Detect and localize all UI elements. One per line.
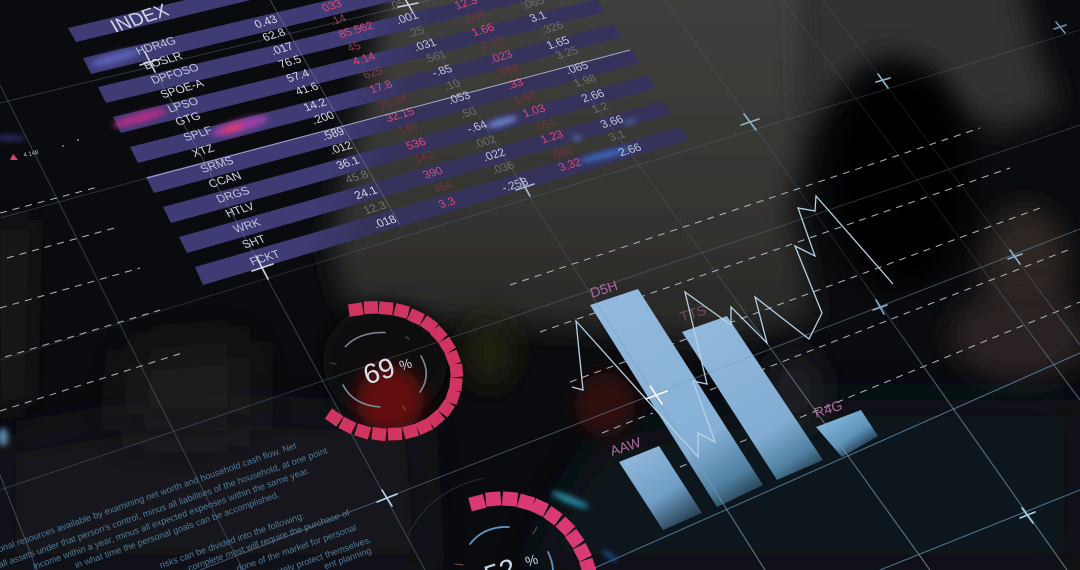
value column 4 — [452, 0, 584, 174]
value column 2: 390 — [421, 164, 445, 182]
bar labels: R4G — [812, 397, 844, 421]
value column 5: 2.66 — [616, 141, 644, 159]
value column 4: .035 — [461, 8, 489, 26]
value column 5: 1.65 — [544, 34, 572, 52]
value column 1 — [252, 13, 399, 231]
gauge segments — [325, 301, 463, 441]
value column 4: 3.32 — [556, 156, 584, 174]
value column 4: 1.67 — [511, 89, 539, 107]
body text paragraphs: income within a year, minus all expected expenses within the same year. — [32, 465, 311, 570]
index column labels: DPFOSO — [149, 61, 201, 87]
value column 5 — [519, 0, 644, 159]
value column 4: .33 — [504, 76, 526, 92]
value column 2 — [320, 0, 458, 211]
value column 3: -.85 — [429, 62, 455, 80]
bar chart — [588, 277, 878, 530]
value column 3: .25 — [405, 24, 427, 40]
value column 2: 536 — [404, 135, 428, 153]
value column 2: 17.8 — [367, 78, 395, 96]
value column 3: .50 — [457, 105, 479, 121]
bar: AAW — [619, 446, 702, 530]
value column 3: -.258 — [499, 175, 531, 195]
index column labels: DRGS — [214, 184, 252, 206]
value column 1: .589 — [319, 125, 347, 143]
table row bands — [68, 0, 689, 285]
value column 1: 24.1 — [352, 184, 380, 202]
gauge: 69 percent — [325, 301, 463, 441]
index column labels: GTG — [173, 110, 203, 128]
value column 1: 14.2 — [301, 96, 329, 114]
inner arcs — [330, 332, 426, 410]
value column 1: 36.1 — [334, 154, 362, 172]
value column 1: 45.8 — [343, 168, 371, 186]
index column labels: XTZ — [189, 142, 217, 160]
value column 5: 1.2 — [589, 100, 611, 116]
index column labels: FCKT — [247, 248, 283, 268]
value column 3: .10 — [441, 77, 463, 93]
index column labels: CCAN — [206, 169, 244, 191]
small ticker legend: 4 148 — [23, 150, 40, 159]
value column 3: .031 — [411, 36, 439, 54]
value column 1: 41.6 — [293, 80, 321, 98]
value column 4: 2.15 — [478, 34, 506, 52]
gauge segments — [468, 491, 597, 570]
bar labels: TTS — [678, 301, 708, 325]
bar: TTS — [682, 316, 823, 480]
index column labels: BOSLR — [141, 50, 185, 72]
value column 2: 85.562 — [336, 19, 376, 41]
value column 2: 354 — [431, 178, 456, 196]
bar labels: AAW — [608, 434, 644, 459]
percent sign: % — [397, 355, 414, 374]
body text paragraphs: in what time the personal goals can be accomplished. — [74, 489, 281, 570]
value column 4: .023 — [487, 48, 515, 66]
value column 2: .14 — [327, 12, 349, 28]
data table — [68, 0, 689, 285]
inner arcs — [455, 527, 553, 570]
grid crosshair markers — [140, 0, 1066, 523]
small ticker legend — [10, 139, 79, 160]
value column 1: 0.43 — [252, 13, 280, 31]
index column labels: WRK — [231, 216, 263, 236]
value column 2: 20.24 — [376, 92, 410, 112]
value column 5: .326 — [538, 19, 566, 37]
index column labels: HTLV — [223, 200, 257, 220]
value column 4: 1.66 — [469, 21, 497, 39]
body text paragraphs: risks can be divided into the following: — [158, 510, 306, 570]
percent sign: % — [523, 551, 540, 570]
value column 5: .065 — [563, 59, 591, 77]
value column 5: 3.1 — [606, 128, 628, 144]
value column 2: 4.14 — [350, 50, 378, 68]
value column 3: .002 — [471, 133, 499, 151]
value column 2: 142 — [412, 148, 436, 166]
index column labels: SRMS — [198, 154, 236, 176]
value column 1: .018 — [371, 213, 399, 231]
value column 3: .561 — [421, 48, 449, 66]
value column 1: .200 — [309, 109, 337, 127]
body text paragraphs: all assets under that person's control, minus all liabilities of the household, at one point — [0, 445, 329, 570]
value column 3: .053 — [445, 89, 473, 107]
value column 5: 3.1 — [527, 9, 549, 25]
line chart — [572, 196, 893, 457]
value column 3: .022 — [480, 146, 508, 164]
index column labels: INDEX — [107, 1, 173, 37]
value column 5: 3.25 — [553, 44, 581, 62]
bar labels — [588, 277, 844, 459]
value column 2: 45 — [345, 39, 363, 55]
index column labels: SHT — [240, 233, 268, 251]
value column 4: 1.23 — [538, 128, 566, 146]
gauge: 52 percent — [408, 478, 619, 570]
band highlights — [90, 46, 637, 164]
index column labels: LPSO — [165, 95, 201, 115]
value column 4: 1.03 — [520, 102, 548, 120]
gauge value: 69 — [359, 351, 399, 391]
value column 4: .051 — [531, 116, 559, 134]
value column 5: 2.66 — [579, 87, 607, 105]
light glints — [550, 489, 619, 563]
value column 1: 76.5 — [276, 53, 304, 71]
index column labels: HDR4G — [134, 34, 178, 58]
value column 2: 149 — [396, 120, 420, 138]
value column 2: 32.15 — [383, 105, 417, 125]
value column 1: 57.4 — [284, 67, 312, 85]
value column 1: 12.3 — [361, 199, 389, 217]
value column 3: .001 — [393, 9, 421, 27]
index column labels — [107, 1, 283, 268]
bar: D5H — [590, 289, 763, 507]
value column 2: 625 — [361, 64, 385, 82]
body text paragraphs: sonal resources available by examining net worth and household cash flow. Net — [0, 440, 298, 556]
dashed chart guide lines — [0, 128, 1080, 467]
index column labels: SPOE-A — [158, 77, 206, 101]
index column labels: SPLF — [181, 124, 215, 144]
value column 1: .017 — [268, 40, 296, 58]
faint outer arc — [408, 478, 484, 535]
value column 5: 3.66 — [598, 113, 626, 131]
value column 4: .061 — [494, 61, 522, 79]
value column 1: .012 — [327, 139, 355, 157]
value column 5: 1.98 — [571, 72, 599, 90]
value column 1: 62.8 — [260, 26, 288, 44]
value column 4: .065 — [548, 144, 576, 162]
bar labels: D5H — [588, 277, 620, 301]
value column 3: .036 — [489, 159, 517, 177]
value column 3: -.64 — [464, 118, 490, 136]
value column 2: 3.3 — [436, 195, 458, 211]
value column 3 — [386, 0, 531, 195]
bar: R4G — [816, 410, 878, 457]
